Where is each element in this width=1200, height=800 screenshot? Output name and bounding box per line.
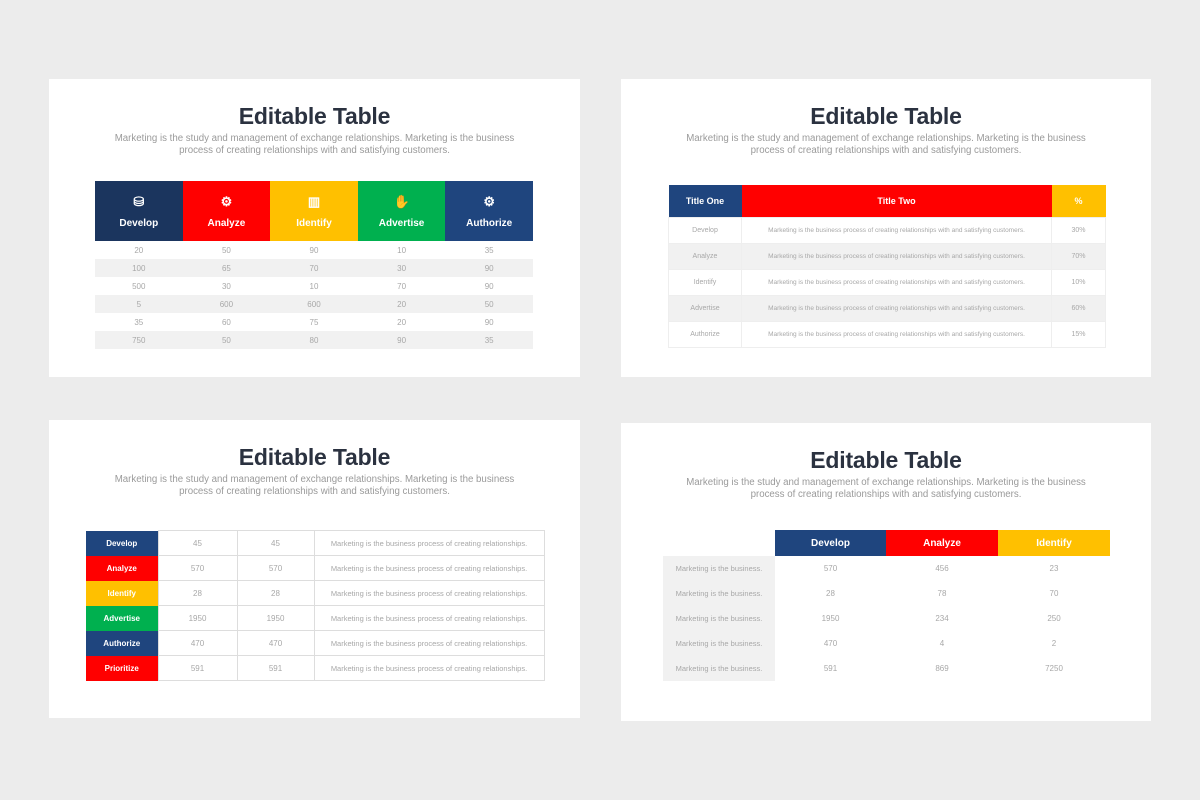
table: column headers with gray label column: Marketing is the business. [676, 639, 762, 648]
title: Editable Table [810, 103, 962, 129]
table: colored row labels: 591 [191, 664, 204, 672]
table: colored row labels: Marketing is the business process of creating relationships. [331, 664, 527, 672]
table: titles and percent: Title Two [877, 196, 916, 206]
title: Editable Table [239, 103, 390, 129]
table: icon header numbers: ▥ [308, 194, 320, 208]
subtitle: process of creating relationships with and satisfying customers. [751, 489, 1021, 500]
table: colored row labels: Analyze [107, 564, 137, 572]
table: titles and percent [668, 185, 1106, 348]
table: column headers with gray label column: Marketing is the business. [676, 564, 762, 573]
panel: top-right [621, 79, 1151, 377]
table: icon header numbers: ⚙ [483, 194, 495, 208]
table: colored row labels: 570 [191, 564, 204, 572]
table: column headers with gray label column: 23 [1050, 564, 1058, 573]
table: icon header numbers: 90 [485, 264, 494, 272]
table: column headers with gray label column: Identify [1036, 538, 1072, 548]
table: icon header numbers: 90 [397, 336, 406, 344]
table: column headers with gray label column: 78 [938, 589, 946, 598]
subtitle: Marketing is the study and management of exchange relationships. Marketing is the business [686, 133, 1086, 144]
table: column headers with gray label column: 570 [824, 564, 837, 573]
table: icon header numbers: Advertise [379, 218, 424, 228]
subtitle [686, 133, 1086, 156]
table: icon header numbers: 600 [220, 300, 233, 308]
panel: bottom-right [621, 423, 1151, 721]
table: titles and percent: Marketing is the business process of creating relationships with and satisfying customers. [768, 330, 1025, 338]
table: icon header numbers: 100 [132, 264, 145, 272]
table: icon header numbers: 600 [307, 300, 321, 308]
table: titles and percent: Advertise [690, 304, 720, 312]
table: column headers with gray label column: 1950 [822, 614, 839, 623]
subtitle: process of creating relationships with and satisfying customers. [179, 145, 450, 156]
table: icon header numbers: 90 [485, 318, 494, 326]
table: icon header numbers: 30 [222, 282, 231, 290]
table: icon header numbers: 35 [485, 246, 494, 254]
subtitle: process of creating relationships with and satisfying customers. [751, 145, 1021, 156]
table: colored row labels: 470 [191, 638, 204, 648]
subtitle [115, 133, 514, 156]
table: colored row labels: Marketing is the business process of creating relationships. [331, 614, 527, 622]
table: icon header numbers: 50 [222, 336, 231, 344]
table: icon header numbers: 30 [397, 264, 406, 272]
subtitle: Marketing is the study and management of exchange relationships. Marketing is the business [115, 474, 514, 485]
table: icon header numbers: 35 [485, 336, 494, 344]
table: icon header numbers: Develop [119, 218, 158, 228]
table: titles and percent: Marketing is the business process of creating relationships with and satisfying customers. [768, 252, 1025, 260]
table: icon header numbers: 35 [134, 318, 143, 326]
table: icon header numbers: ⛁ [133, 194, 144, 208]
table: icon header numbers: 20 [397, 300, 406, 308]
table: icon header numbers: 70 [310, 264, 318, 272]
table: colored row labels: Identify [108, 588, 136, 598]
table: titles and percent: Marketing is the business process of creating relationships with and satisfying customers. [768, 304, 1025, 312]
table: icon header numbers: Analyze [207, 218, 245, 228]
table: column headers with gray label column: 250 [1047, 614, 1061, 623]
table: icon header numbers: 750 [132, 336, 145, 344]
panel: bottom-left [49, 420, 580, 718]
table: column headers with gray label column: 7250 [1045, 664, 1063, 673]
table: icon header numbers: Authorize [466, 218, 512, 228]
table: titles and percent: Title One [686, 196, 724, 206]
title: Editable Table [810, 447, 962, 473]
table: titles and percent: Marketing is the business process of creating relationships with and satisfying customers. [768, 278, 1025, 286]
table: column headers with gray label column: Develop [811, 538, 850, 548]
table: icon header numbers: ✋ [393, 194, 410, 208]
table: titles and percent: Analyze [693, 252, 717, 260]
table: icon header numbers [95, 181, 533, 349]
table: colored row labels: 28 [193, 588, 202, 598]
table: icon header numbers: 60 [222, 318, 231, 326]
table: titles and percent: % [1074, 196, 1082, 206]
table: titles and percent: Marketing is the business process of creating relationships with and satisfying customers. [768, 226, 1025, 234]
subtitle: Marketing is the study and management of exchange relationships. Marketing is the business [115, 133, 514, 144]
table: colored row labels: 570 [269, 564, 282, 572]
panel: top-left [49, 79, 580, 377]
table: titles and percent: 60% [1071, 304, 1086, 312]
table: column headers with gray label column: 70 [1050, 589, 1058, 598]
table: titles and percent: Develop [692, 226, 718, 234]
table: icon header numbers: 500 [132, 282, 145, 290]
table: colored row labels: Marketing is the business process of creating relationships. [331, 564, 527, 572]
subtitle [115, 474, 514, 497]
table: titles and percent: Authorize [690, 330, 720, 338]
table: colored row labels: 470 [269, 638, 282, 648]
table: titles and percent: 30% [1071, 226, 1086, 234]
table: icon header numbers: 10 [310, 282, 318, 290]
subtitle [686, 477, 1086, 500]
table: column headers with gray label column [663, 530, 1110, 681]
table: colored row labels: Marketing is the business process of creating relationships. [331, 638, 527, 648]
table: column headers with gray label column: 234 [935, 614, 949, 623]
table: column headers with gray label column: 2 [1052, 639, 1056, 648]
table: icon header numbers: 65 [222, 264, 231, 272]
table: column headers with gray label column: 591 [824, 664, 837, 673]
table: colored row labels: 591 [269, 664, 282, 672]
table: colored row labels: 28 [271, 588, 280, 598]
table: icon header numbers: 50 [222, 246, 231, 254]
table: icon header numbers: 90 [485, 282, 494, 290]
table: titles and percent: 10% [1071, 278, 1086, 286]
table: column headers with gray label column: 4 [940, 639, 944, 648]
table: colored row labels: 45 [271, 538, 280, 548]
table: icon header numbers: 5 [137, 300, 141, 308]
table: colored row labels: Marketing is the business process of creating relationships. [331, 538, 527, 548]
table: icon header numbers: 90 [310, 246, 318, 254]
table: column headers with gray label column: 470 [824, 639, 837, 648]
table: icon header numbers: 80 [310, 336, 318, 344]
subtitle: Marketing is the study and management of exchange relationships. Marketing is the business [686, 477, 1086, 488]
table: icon header numbers: ⚙ [221, 194, 232, 208]
table: column headers with gray label column: 28 [826, 589, 835, 598]
table: colored row labels: Authorize [103, 638, 140, 648]
table: icon header numbers: 50 [485, 300, 494, 308]
title: Editable Table [239, 444, 390, 470]
table: colored row labels: 1950 [189, 614, 206, 622]
table: icon header numbers: 70 [397, 282, 406, 290]
table: column headers with gray label column: Marketing is the business. [676, 589, 762, 598]
table: colored row labels: 45 [193, 538, 202, 548]
table: colored row labels: Advertise [104, 614, 140, 622]
subtitle: process of creating relationships with and satisfying customers. [179, 486, 450, 497]
table: column headers with gray label column: Marketing is the business. [676, 664, 762, 673]
table: icon header numbers: 75 [310, 318, 318, 326]
table: titles and percent: 15% [1071, 330, 1086, 338]
table: column headers with gray label column: 869 [935, 664, 949, 673]
table: colored row labels: 1950 [267, 614, 284, 622]
table: colored row labels: Marketing is the business process of creating relationships. [331, 588, 527, 598]
table: icon header numbers: 20 [134, 246, 143, 254]
table: colored row labels: Prioritize [105, 664, 139, 672]
table: column headers with gray label column: Marketing is the business. [676, 614, 762, 623]
table: icon header numbers: Identify [296, 218, 332, 228]
table: titles and percent: Identify [694, 278, 716, 286]
table: colored row labels: Develop [106, 538, 137, 548]
table: column headers with gray label column: Analyze [923, 538, 961, 548]
table: colored row labels [86, 530, 545, 681]
table: icon header numbers: 20 [397, 318, 406, 326]
table: titles and percent: 70% [1071, 252, 1086, 260]
table: column headers with gray label column: 456 [935, 564, 949, 573]
table: icon header numbers: 10 [397, 246, 406, 254]
